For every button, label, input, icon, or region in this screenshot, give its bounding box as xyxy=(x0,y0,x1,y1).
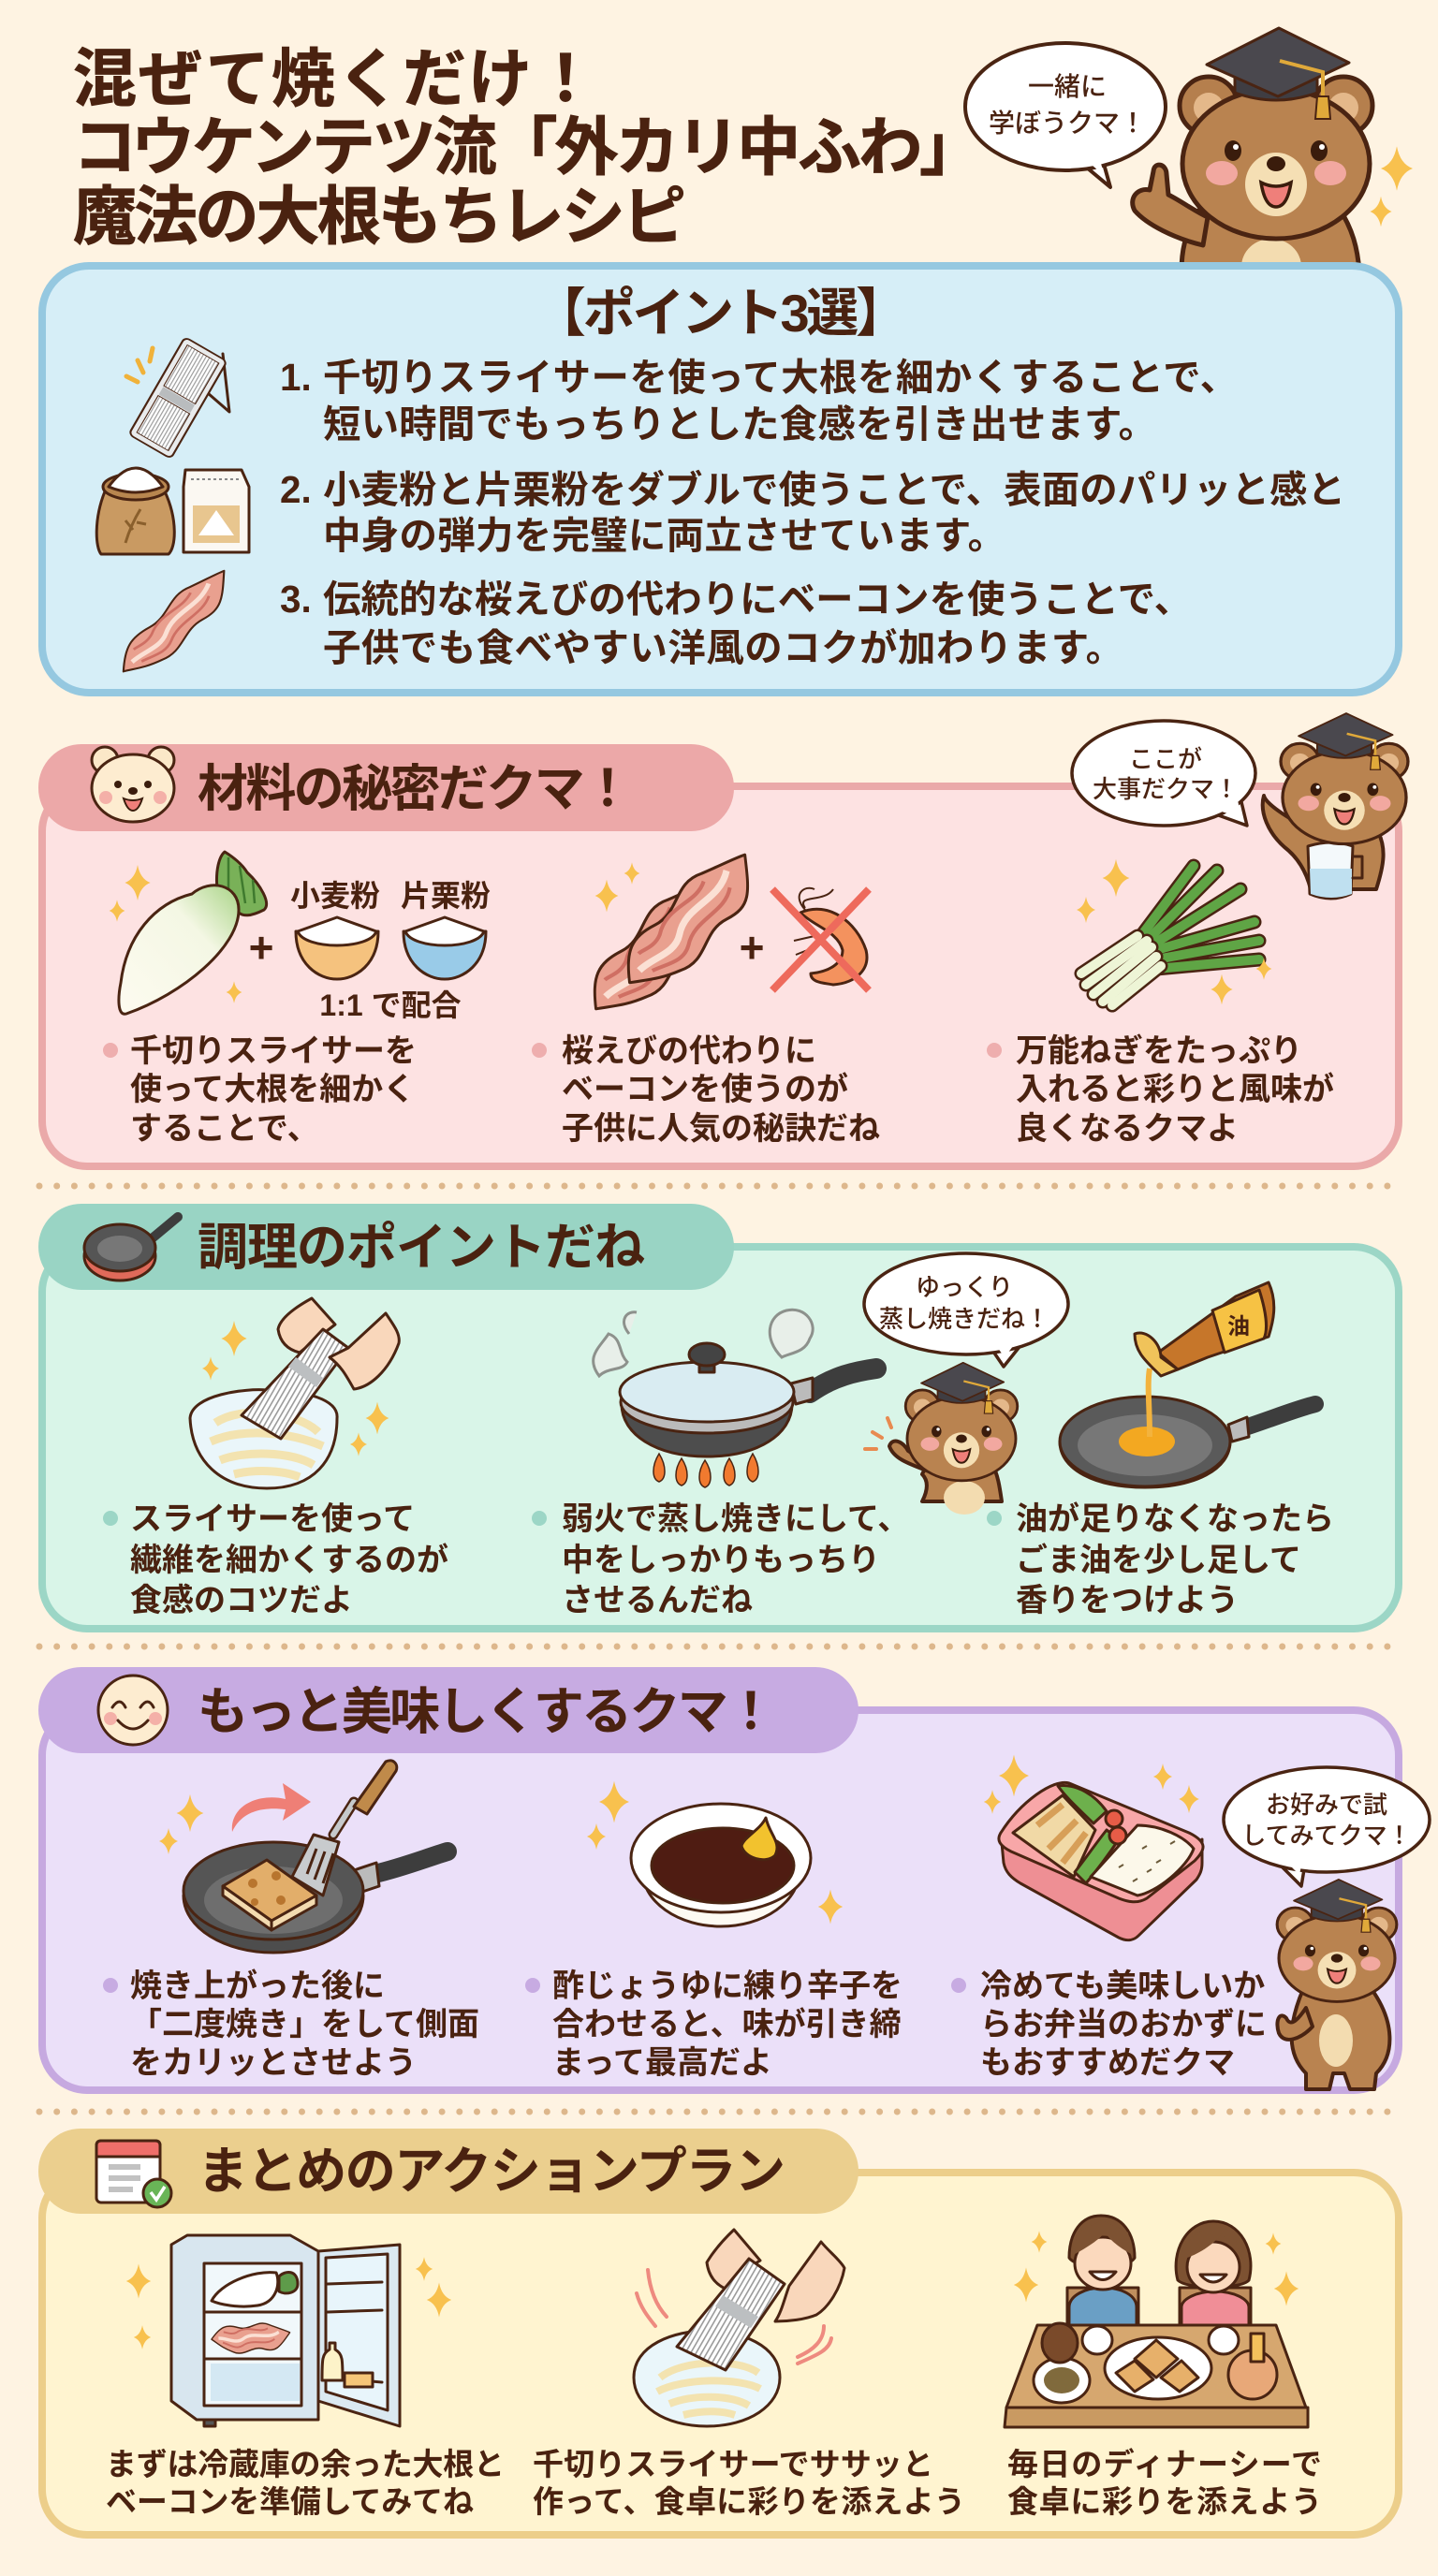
illustration: radish and flour: 片栗粉 xyxy=(401,879,491,913)
speech bubble: slowly steam-fry: ゆっくり xyxy=(916,1273,1013,1301)
illustration: sesame oil into pan xyxy=(1060,1282,1315,1487)
illustration: radish and flour: 小麦粉 xyxy=(290,879,380,913)
heading: ingredients: 材料の秘密だクマ！ xyxy=(198,761,633,817)
text: ingredient notes: することで、 xyxy=(130,1111,319,1147)
speech bubble: this is important: 大事だクマ！ xyxy=(1093,775,1239,803)
text: cooking notes: 繊維を細かくするのが xyxy=(130,1542,448,1578)
illustration: bacon instead of shrimp xyxy=(578,839,869,1032)
section tab: tastier xyxy=(38,1667,858,1753)
illustration: radish and flour: 1:1 で配合 xyxy=(319,988,462,1022)
icon: bacon xyxy=(112,560,240,687)
heading: cooking: 調理のポイントだね xyxy=(198,1220,645,1276)
text: ingredient notes: 桜えびの代わりに xyxy=(562,1033,816,1069)
icon: frying pan xyxy=(84,1217,178,1281)
text: cooking notes: 弱火で蒸し焼きにして、 xyxy=(562,1501,909,1537)
text: ingredient notes: ベーコンを使うのが xyxy=(562,1071,848,1107)
point 2 text: 2. xyxy=(280,468,312,511)
icon: flour bags xyxy=(96,468,249,554)
text: tips notes: もおすすめだクマ xyxy=(980,2045,1235,2081)
text: ingredient notes: 入れると彩りと風味が xyxy=(1016,1071,1334,1107)
point 3 text: 子供でも食べやすい洋風のコクが加わります。 xyxy=(323,626,1123,669)
text: cooking notes: させるんだね xyxy=(562,1583,753,1618)
speech bubble: this is important xyxy=(1072,721,1255,826)
heading: tastier: もっと美味しくするクマ！ xyxy=(198,1684,776,1740)
speech bubble: let's learn: 一緒に xyxy=(1028,72,1107,101)
illustration: bacon instead of shrimp: + xyxy=(740,923,764,972)
text: tips notes xyxy=(103,1968,1267,2081)
panel: cooking points xyxy=(38,1204,1399,1629)
illustration: radish and flour xyxy=(110,852,491,1022)
heading: action plan: まとめのアクションプラン xyxy=(198,2144,785,2200)
illustration: slicing radish into bowl xyxy=(190,1298,399,1488)
speech bubble: slowly steam-fry: 蒸し焼きだね！ xyxy=(879,1305,1049,1333)
section tab: action plan xyxy=(38,2129,858,2214)
text: cooking notes: スライサーを使って xyxy=(130,1501,415,1537)
point 1 text: 短い時間でもっちりとした食感を引き出せます。 xyxy=(323,402,1156,446)
text: cooking notes: 中をしっかりもっちり xyxy=(562,1543,880,1578)
mascot: bear with thumbs up xyxy=(1133,28,1413,295)
illustration: re-frying the mochi xyxy=(159,1761,448,1953)
illustration: family dinner xyxy=(1005,2216,1308,2427)
point 3 text xyxy=(280,578,1192,669)
icon: bear face xyxy=(92,747,174,822)
text: tips notes: 冷めても美味しいか xyxy=(980,1969,1265,2004)
text: ingredient notes xyxy=(103,1033,1334,1147)
text: ingredient notes: 子供に人気の秘訣だね xyxy=(562,1111,880,1147)
speech bubble: slowly steam-fry xyxy=(864,1253,1068,1367)
illustration: bento box xyxy=(984,1755,1203,1940)
text: tips notes: 「二度焼き」をして側面 xyxy=(130,2007,479,2042)
speech bubble: let's learn xyxy=(965,43,1166,187)
icon: calendar with check xyxy=(96,2141,171,2207)
speech bubble: try to taste: お好みで試 xyxy=(1266,1791,1387,1819)
speech bubble: try to taste xyxy=(1224,1767,1430,1886)
text: cooking notes: 食感のコツだよ xyxy=(130,1583,353,1618)
speech bubble: let's learn: 学ぼうクマ！ xyxy=(989,109,1146,138)
text: action notes: 作って、食卓に彩りを添えよう xyxy=(533,2484,965,2519)
text: tips notes: 焼き上がった後に xyxy=(130,1968,385,2004)
icon: slicer xyxy=(126,337,229,459)
text: ingredient notes: 良くなるクマよ xyxy=(1016,1111,1239,1147)
point 3 text: 伝統的な桜えびの代わりにベーコンを使うことで、 xyxy=(323,578,1192,621)
text: cooking notes: 香りをつけよう xyxy=(1016,1583,1239,1618)
point 2 text xyxy=(280,468,1345,557)
title: 魔法の大根もちレシピ xyxy=(73,182,686,253)
text: tips notes: まって最高だよ xyxy=(552,2045,772,2081)
icon: smile face xyxy=(98,1676,168,1745)
text: cooking notes: ごま油を少し足して xyxy=(1016,1543,1301,1578)
illustration: scallions xyxy=(1077,859,1271,1005)
panel: make it tastier xyxy=(38,1667,1430,2090)
text: cooking notes xyxy=(103,1500,1334,1618)
text: tips notes: 合わせると、味が引き締 xyxy=(552,2006,902,2042)
text: ingredient notes: 万能ねぎをたっぷり xyxy=(1016,1033,1302,1069)
text: tips notes: をカリッとさせよう xyxy=(130,2045,417,2081)
text: ingredient notes: 使って大根を細かく xyxy=(130,1072,415,1107)
illustration: covered pan on low heat xyxy=(594,1310,876,1487)
panel: action plan xyxy=(38,2129,1399,2535)
speech bubble: try to taste: してみてクマ！ xyxy=(1241,1822,1412,1850)
illustration: slicing with hands xyxy=(634,2230,844,2426)
section tab: ingredients xyxy=(38,744,734,831)
point 2 text: 小麦粉と片栗粉をダブルで使うことで、表面のパリッと感と xyxy=(323,468,1345,511)
point 1 text: 千切りスライサーを使って大根を細かくすることで、 xyxy=(323,356,1238,399)
text: action notes xyxy=(106,2447,1322,2519)
heading: points: 【ポイント3選】 xyxy=(534,284,908,343)
point 1 text: 1. xyxy=(280,356,312,399)
text: action notes: 毎日のディナーシーで xyxy=(1007,2447,1322,2481)
text: action notes: ベーコンを準備してみてね xyxy=(106,2484,474,2519)
illustration: open fridge xyxy=(126,2235,451,2426)
illustration: sauce with mustard xyxy=(587,1781,843,1926)
text: tips notes: らお弁当のおかずに xyxy=(980,2007,1267,2042)
text: cooking notes: 油が足りなくなったら xyxy=(1016,1500,1334,1537)
point 1 text xyxy=(280,356,1238,446)
text: action notes: 食卓に彩りを添えよう xyxy=(1007,2484,1322,2519)
text: action notes: 千切りスライサーでササッと xyxy=(533,2447,933,2481)
illustration: sesame oil into pan: 油 xyxy=(1227,1314,1250,1339)
text: ingredient notes: 千切りスライサーを xyxy=(130,1033,417,1069)
speech bubble: this is important: ここが xyxy=(1129,745,1202,773)
mascot: bear with measuring cup xyxy=(1263,713,1408,899)
point 3 text: 3. xyxy=(280,578,312,621)
point 2 text: 中身の弾力を完璧に両立させています。 xyxy=(323,514,1005,557)
panel: three points xyxy=(42,266,1399,693)
mascot: full body bear xyxy=(1277,1880,1397,2089)
illustration: radish and flour: + xyxy=(249,923,273,972)
panel: ingredients xyxy=(38,713,1408,1166)
mascot: waving bear xyxy=(865,1363,1018,1515)
title: 混ぜて焼くだけ！ xyxy=(73,44,597,115)
title xyxy=(73,44,983,253)
section tab: cooking xyxy=(38,1204,734,1290)
title: コウケンテツ流「外カリ中ふわ」 xyxy=(73,112,983,183)
text: tips notes: 酢じょうゆに練り辛子を xyxy=(552,1969,902,2004)
text: action notes: まずは冷蔵庫の余った大根と xyxy=(106,2447,505,2481)
